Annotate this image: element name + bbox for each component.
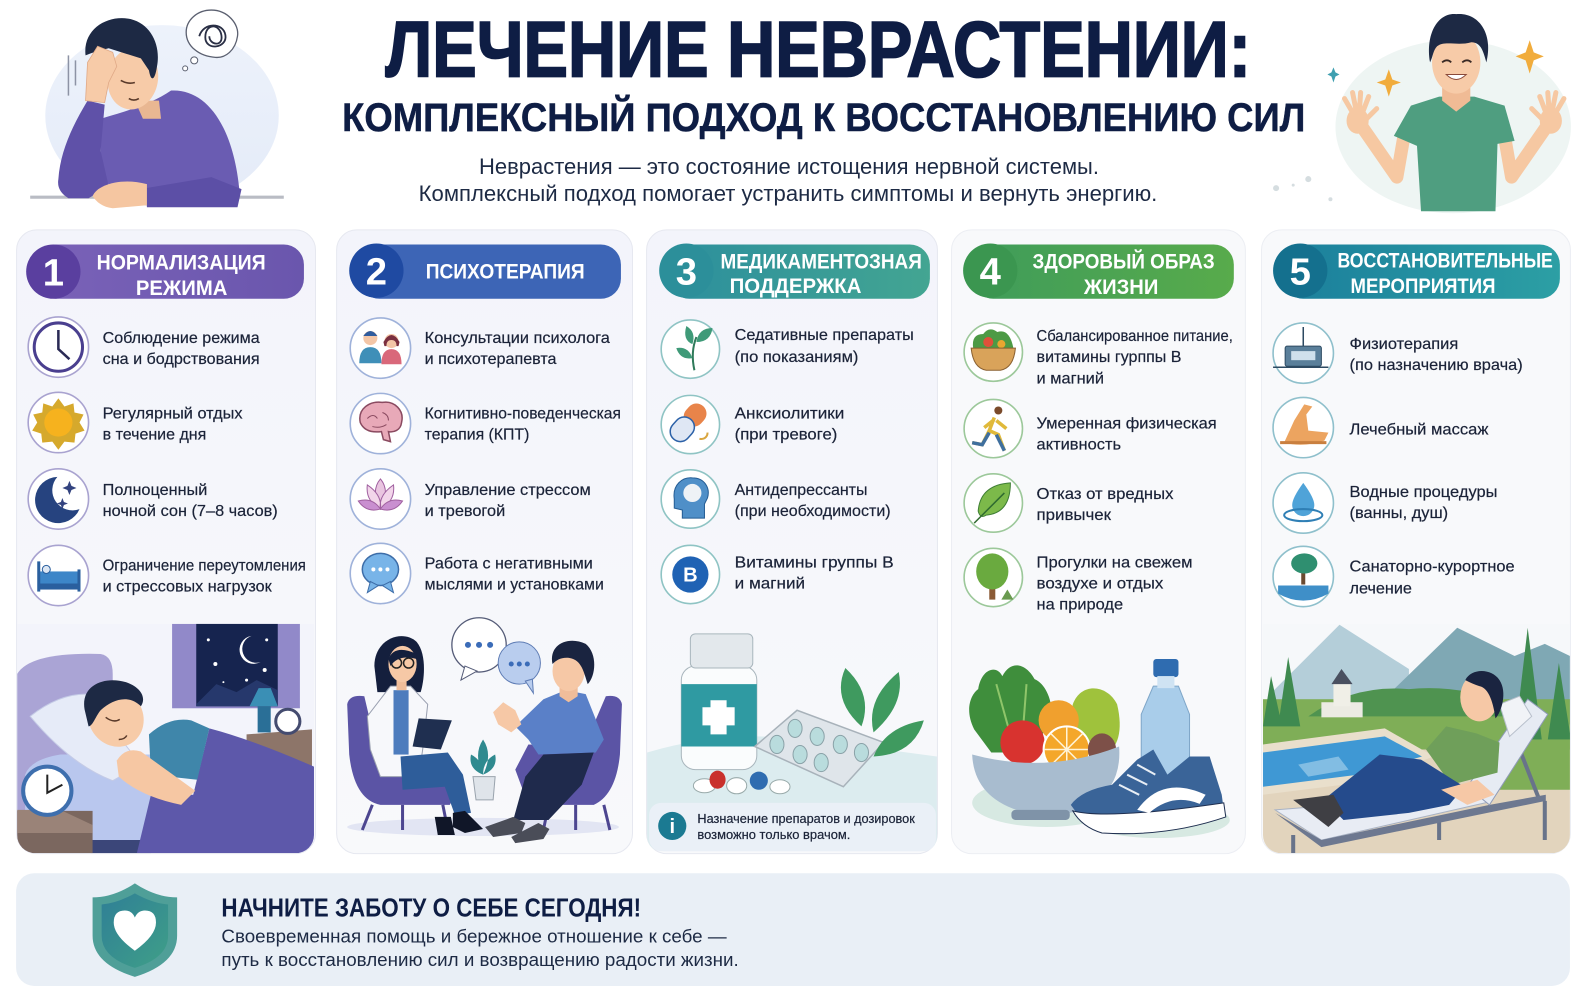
text: sedatives: (по показаниям) [735,348,858,366]
text: limit overwork: и стрессовых нагрузок [103,578,273,596]
text: walks [1037,553,1193,614]
text: walks: воздухе и отдых [1037,575,1163,593]
header 3 [659,243,930,299]
text: water [1350,483,1497,522]
text: night sleep [103,481,278,520]
illustration: tired man [30,10,284,208]
text: negative thoughts: Работа с негативными [425,554,593,572]
text: sleep regime: Соблюдение режима [103,329,260,347]
text: sanatorium: лечение [1350,580,1412,598]
panel 5: recovery [1261,230,1571,854]
illustration: food and shoe [969,659,1230,838]
text: physiotherapy [1350,335,1523,374]
icon: water drop [1273,473,1333,533]
icon: speech bubble [350,543,411,604]
text: nutrition: витамины гурппы В [1037,348,1181,366]
text: activity: активность [1037,436,1121,454]
header 1: 1 [43,252,64,295]
header 2 [349,243,621,299]
text: sedatives: Седативные препараты [735,326,914,344]
text: sedatives [735,326,914,366]
intro text [419,154,1157,206]
icon: salad bowl [964,323,1022,381]
header 5: МЕРОПРИЯТИЯ [1351,275,1495,298]
text: limit overwork: Ограничение переутомления [103,556,306,574]
header 5 [1273,243,1560,299]
icon: head brain [661,470,720,528]
text: anxiolytics: (при тревоге) [735,426,837,444]
text: stress: Управление стрессом [425,481,591,499]
text: physiotherapy: (по назначению врача) [1350,356,1523,374]
text: vitamins: и магний [735,575,805,593]
header 4 [963,243,1234,299]
note: doctor only: Назначение препаратов и дозировок [697,812,915,826]
icon: capsule [661,395,720,454]
text: water: (ванны, душ) [1350,504,1448,522]
text: anxiolytics [735,405,844,444]
icon: runner [964,399,1022,458]
footer text [221,927,739,970]
header 5: 5 [1290,251,1311,294]
text: massage: Лечебный массаж [1350,421,1489,439]
text: vitamins [735,553,894,593]
icon: physio device [1273,323,1333,383]
text: anxiolytics: Анксиолитики [735,405,844,423]
header 2: 2 [366,251,387,294]
text: antidepressants [735,481,891,520]
text: negative thoughts [425,554,604,594]
text: rest: Регулярный отдых [103,405,243,423]
text: consultations: и психотерапевта [425,350,557,368]
text: CBT: терапия (КПТ) [425,426,529,444]
text: limit overwork [103,556,306,596]
text: rest [103,405,243,444]
text: stress [425,481,591,520]
header 4: ЗДОРОВЫЙ ОБРАЗ [1033,250,1215,274]
footer heading: НАЧНИТЕ ЗАБОТУ О СЕБЕ СЕГОДНЯ! [221,893,641,923]
text: night sleep: Полноценный [103,481,207,499]
icon: tree [964,548,1022,607]
illustration: therapy session [347,618,622,843]
text: nutrition: Сбалансированное питание, [1037,327,1233,345]
illustration: resort scene [1263,624,1571,853]
text: stress: и тревогой [425,502,505,520]
text: nutrition: и магний [1037,369,1104,387]
text: sanatorium: Санаторно-курортное [1350,557,1515,575]
icon: brain [350,393,411,454]
footer text: Своевременная помощь и бережное отношение к себе — [221,927,728,947]
text: antidepressants: (при необходимости) [735,502,891,520]
text: rest: в течение дня [103,426,206,444]
note: doctor only [649,803,936,851]
illustration: happy man [1273,14,1571,213]
text: activity [1037,415,1217,454]
icon: leaf [964,474,1022,532]
icon: massage [1273,397,1333,458]
header 2: ПСИХОТЕРАПИЯ [426,261,585,284]
panel 3: medication [647,230,937,854]
subtitle: КОМПЛЕКСНЫЙ ПОДХОД К ВОССТАНОВЛЕНИЮ СИЛ [342,94,1305,140]
header 3: 3 [676,251,697,294]
title: ЛЕЧЕНИЕ НЕВРАСТЕНИИ: [385,5,1251,93]
note: doctor only: возможно только врачом. [697,828,850,842]
text: bad habits [1037,485,1173,524]
intro text: Неврастения — это состояние истощения нервной системы. [479,154,1099,179]
panel 1: normalization [17,230,315,856]
header 1: НОРМАЛИЗАЦИЯ [97,252,266,275]
header 4: 4 [980,251,1002,294]
text: water: Водные процедуры [1350,483,1497,501]
text: nutrition [1037,327,1233,387]
panel 2: psychotherapy [337,230,633,854]
text: vitamins: Витамины группы В [735,553,894,571]
header 3: ПОДДЕРЖКА [730,275,861,298]
icon: consultation [350,318,411,378]
text: night sleep: ночной сон (7–8 часов) [103,502,278,520]
panel 4: healthy lifestyle [952,230,1245,854]
icon: vitamin B [661,545,720,604]
footer text: путь к восстановлению сил и возвращению радости жизни. [221,950,739,970]
text: consultations [425,329,610,368]
header 1 [26,244,304,300]
footer banner [16,873,1570,986]
text: consultations: Консультации психолога [425,329,610,347]
note: doctor only: i [669,816,675,838]
text: bad habits: привычек [1037,506,1112,524]
icon: lotus [350,469,411,529]
icon: bed [28,545,89,606]
icon: sun [28,392,89,453]
header 3: МЕДИКАМЕНТОЗНАЯ [721,251,922,274]
icon: vitamin B: В [683,565,698,587]
icon: resort [1273,546,1333,607]
text: CBT [425,405,621,444]
icon: herb [661,320,720,378]
icon: shield with heart [93,883,177,977]
illustration: pills and bottle [647,634,937,851]
text: negative thoughts: мыслями и установками [425,576,604,594]
illustration: sleeping man [17,624,314,856]
text: walks: на природе [1037,596,1123,614]
text: sanatorium [1350,557,1515,598]
intro text: Комплексный подход помогает устранить симптомы и вернуть энергию. [419,181,1157,206]
text: sleep regime: сна и бодрствования [103,350,260,368]
text: physiotherapy: Физиотерапия [1350,335,1458,353]
text: activity: Умеренная физическая [1037,415,1217,433]
header 4: ЖИЗНИ [1083,276,1158,299]
text: CBT: Когнитивно-поведенческая [425,405,621,423]
text: bad habits: Отказ от вредных [1037,485,1173,503]
text: sleep regime [103,329,260,368]
icon: moon [28,469,89,529]
header 1: РЕЖИМА [136,277,227,300]
text: antidepressants: Антидепрессанты [735,481,867,499]
icon: clock [28,317,89,377]
text: walks: Прогулки на свежем [1037,553,1193,571]
